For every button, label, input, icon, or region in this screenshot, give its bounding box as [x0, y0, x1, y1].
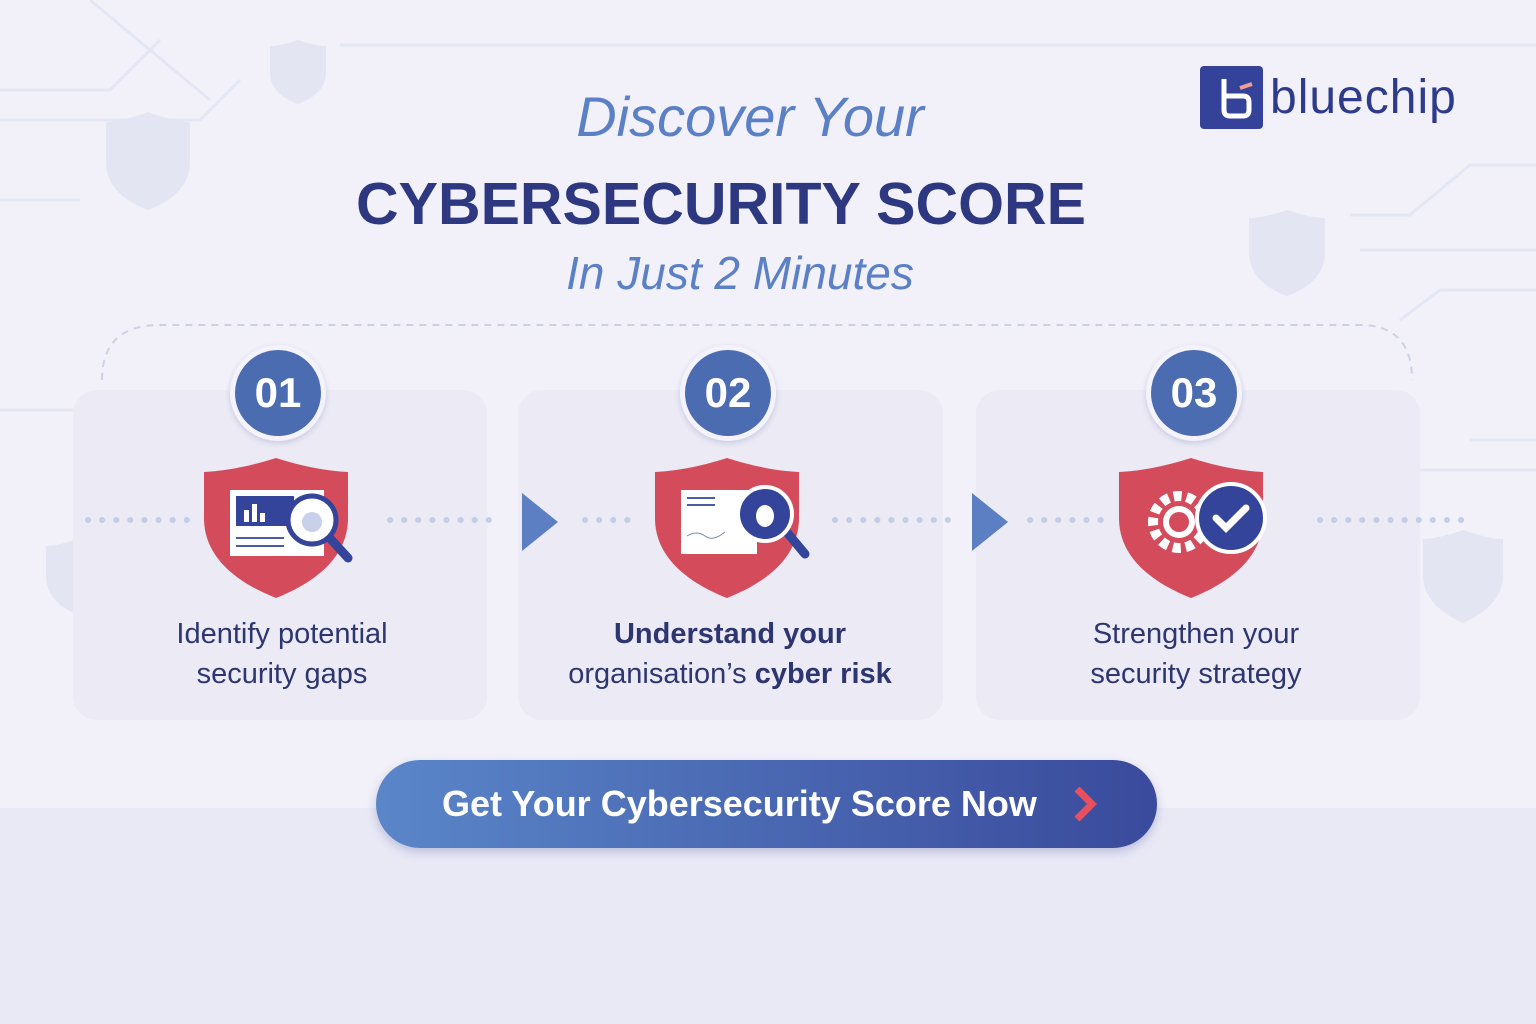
- step 3 text: security strategy: [1090, 658, 1302, 690]
- icon: shield 1: [204, 458, 352, 598]
- title: [356, 85, 1086, 299]
- step 02 number: 02: [705, 369, 751, 416]
- step 2 text: Understand your: [614, 618, 846, 650]
- step 01 number: [230, 345, 326, 441]
- card 2: [518, 390, 943, 720]
- step 1 text: [176, 618, 388, 690]
- CTA button: Get Your Cybersecurity Score Now: [442, 783, 1037, 824]
- CTA button: [376, 760, 1157, 848]
- step 1 text: security gaps: [197, 658, 367, 690]
- text: In Just 2 Minutes: [566, 247, 914, 299]
- step 03 number: [1146, 345, 1242, 441]
- icon: shield 3: [1119, 458, 1267, 598]
- dotted connectors: [85, 517, 1464, 523]
- logo: [1200, 66, 1457, 129]
- step 03 number: 03: [1171, 369, 1217, 416]
- step 02 number: [680, 345, 776, 441]
- arrow 2: [972, 493, 1008, 551]
- logo text: bluechip: [1270, 71, 1457, 124]
- lower background band: [0, 808, 1536, 1024]
- step 3 text: Strengthen your: [1093, 618, 1299, 650]
- step 01 number: 01: [255, 369, 301, 416]
- logo icon: [1200, 66, 1263, 129]
- icon: shield 2: [655, 458, 810, 598]
- arrow 1: [522, 493, 558, 551]
- step 2 text: [568, 618, 892, 690]
- card 1: [73, 390, 487, 720]
- text: Discover Your: [576, 85, 924, 148]
- step 2 text: organisation’s cyber risk: [568, 658, 892, 690]
- card 3: [976, 390, 1420, 720]
- step 3 text: [1090, 618, 1302, 690]
- text: CYBERSECURITY SCORE: [356, 171, 1086, 237]
- step 1 text: Identify potential: [176, 618, 388, 650]
- icon: chevron: [1074, 786, 1097, 822]
